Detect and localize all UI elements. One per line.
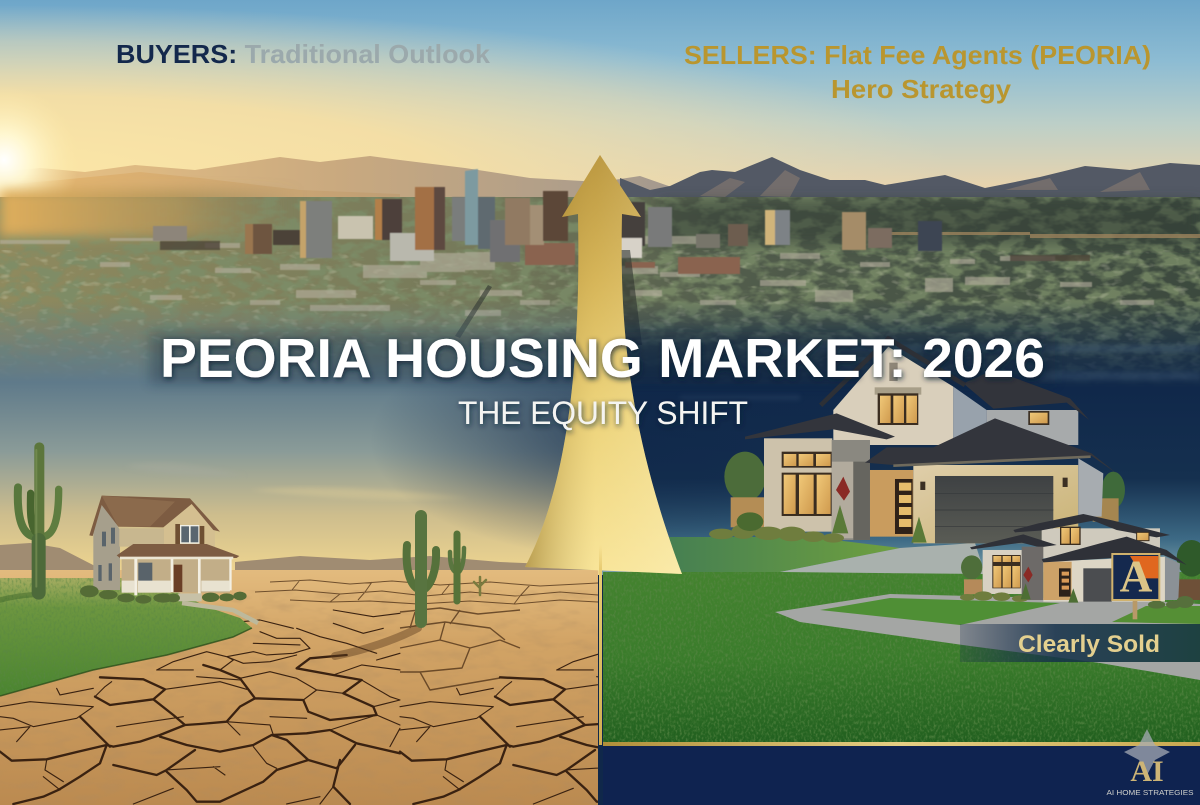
subtitle: THE EQUITY SHIFT bbox=[458, 395, 748, 431]
label: sellers hero strategy: SELLERS: Flat Fee Agents (PEORIA) bbox=[684, 40, 1151, 70]
footer logo: AI Home Strategies bbox=[1106, 729, 1194, 797]
title halo bbox=[150, 332, 1055, 384]
icon: tall saguaro cactus bbox=[0, 447, 59, 600]
skyline towers bbox=[153, 169, 942, 262]
mountains bbox=[0, 0, 1200, 205]
driveway and walkway bbox=[775, 594, 1200, 680]
low-rise buildings bbox=[0, 236, 1154, 316]
sign post bbox=[1133, 601, 1137, 619]
footer logo: AI Home Strategies: AI bbox=[1130, 755, 1164, 788]
dusk blend at centre bbox=[370, 320, 910, 560]
label: sellers hero strategy bbox=[684, 40, 1151, 104]
sky with sun glow bbox=[0, 0, 1200, 205]
divider line bbox=[599, 545, 602, 745]
grass: buyers side bbox=[0, 578, 260, 698]
banner: Clearly Sold: Clearly Sold bbox=[1018, 631, 1160, 658]
lower sky: buyers side bbox=[0, 300, 600, 575]
label: buyers traditional outlook: BUYERS: Traditional Outlook bbox=[116, 39, 491, 69]
crack network bbox=[0, 609, 598, 805]
real estate sign bbox=[1112, 552, 1159, 602]
footer bar bbox=[603, 742, 1200, 805]
desert ground with cracks bbox=[0, 543, 598, 805]
golden arrow bbox=[525, 155, 682, 574]
distant fine cracks bbox=[255, 580, 598, 690]
banner: Clearly Sold bbox=[960, 624, 1200, 662]
small house with sign bbox=[960, 514, 1200, 619]
small farmhouse bbox=[80, 496, 247, 604]
label: sellers hero strategy: Hero Strategy bbox=[831, 74, 1012, 104]
city and tree canopy bbox=[0, 169, 1200, 402]
title: PEORIA HOUSING MARKET: 2026 bbox=[160, 327, 1045, 389]
real estate sign: A bbox=[1120, 552, 1153, 602]
footer logo: AI Home Strategies: AI HOME STRATEGIES bbox=[1106, 788, 1194, 797]
lower sky: sellers side bbox=[600, 300, 1200, 575]
icon: distant saguaro cactus bbox=[335, 516, 486, 656]
city roads bbox=[455, 250, 642, 345]
large modern house bbox=[709, 339, 1125, 543]
green lawn: sellers side bbox=[603, 537, 1200, 744]
